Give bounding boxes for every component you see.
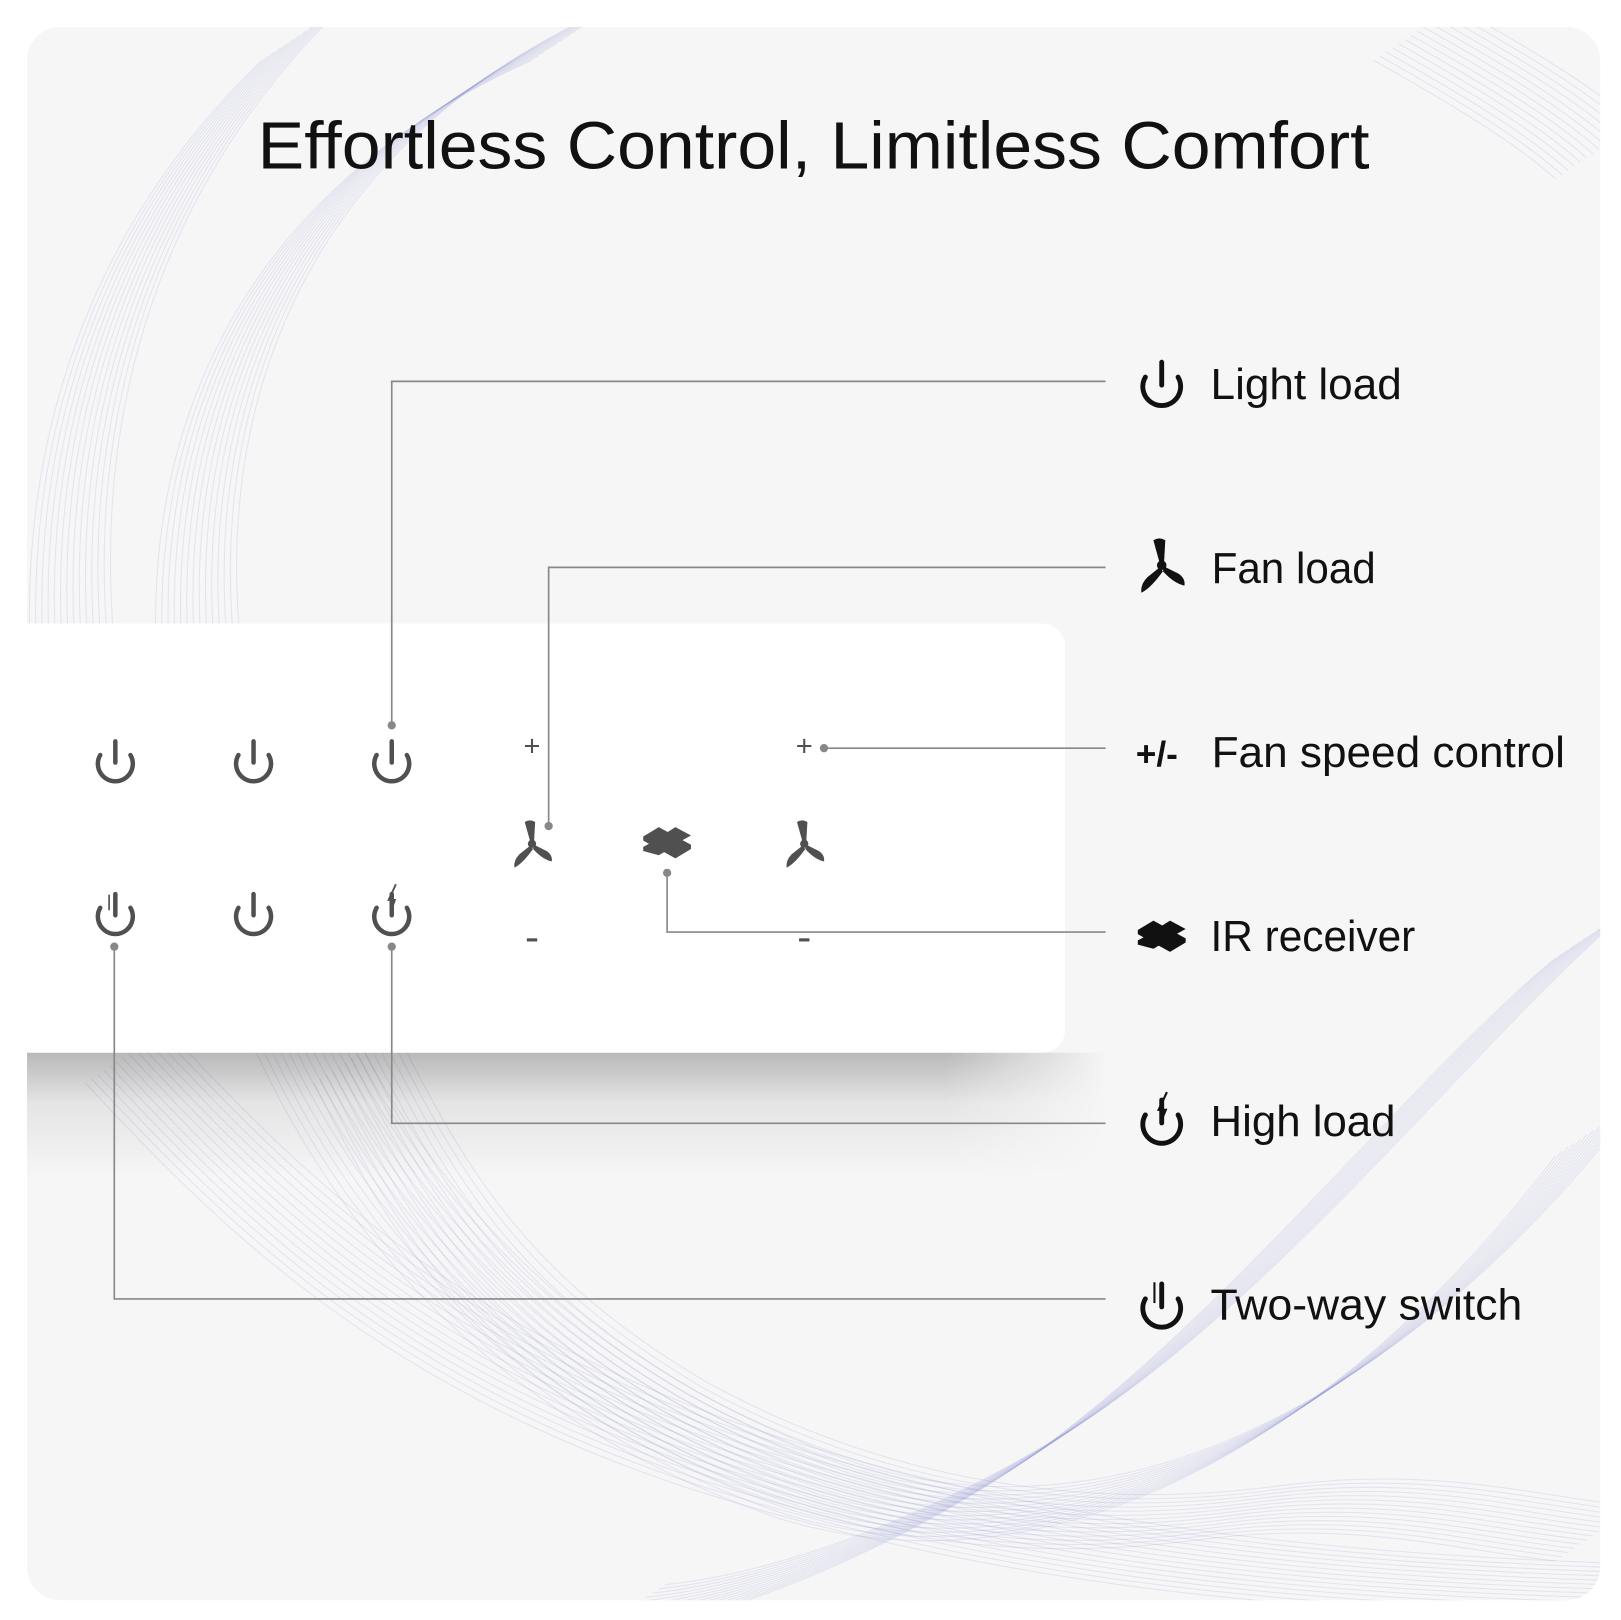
- label: fan load: [1141, 538, 1376, 593]
- icon: bottom row buttons: [98, 884, 409, 934]
- switch panel: [27, 623, 1065, 1053]
- icon: light load buttons top row: [98, 741, 409, 781]
- label: IR receiver: IR receiver: [1211, 912, 1415, 961]
- legend labels: [1136, 360, 1565, 1330]
- label: light load: Light load: [1211, 360, 1402, 409]
- label: two-way switch: Two-way switch: [1211, 1281, 1522, 1330]
- title: Effortless Control, Limitless Comfort: [258, 109, 1370, 183]
- leader lines: [114, 381, 1106, 1299]
- label: high load: High load: [1211, 1097, 1396, 1146]
- fan speed +/- marks: [524, 730, 813, 941]
- label: fan speed control: Fan speed control: [1212, 728, 1565, 777]
- panel shadow: [27, 1052, 1086, 1142]
- fan speed +/- marks: +: [524, 730, 541, 762]
- fan speed +/- marks: +: [796, 730, 813, 762]
- leader dots: [110, 721, 828, 951]
- icon: fans and IR on panel: [514, 820, 824, 868]
- label: fan load: Fan load: [1212, 544, 1376, 593]
- label: high load: [1143, 1092, 1396, 1146]
- label: fan speed control: +/-: [1136, 735, 1178, 774]
